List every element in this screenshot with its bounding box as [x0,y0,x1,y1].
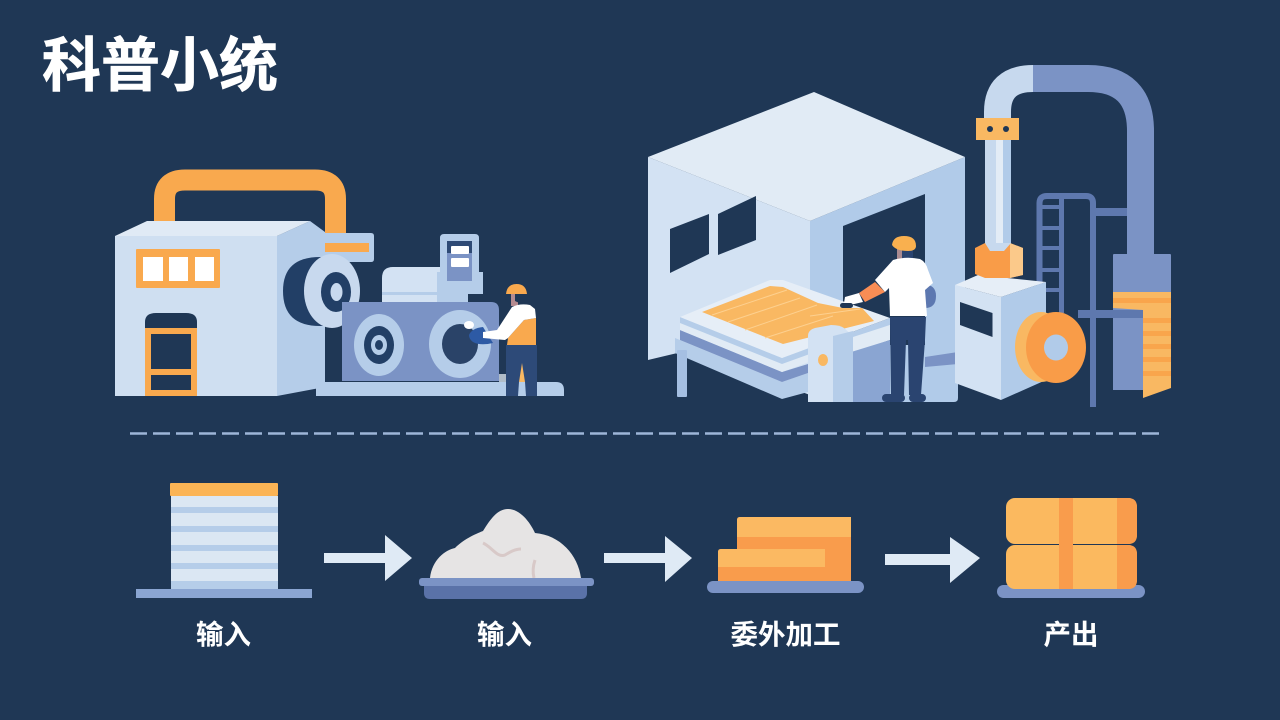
title: 科普小统 [42,33,278,99]
step 2: powder pile icon [419,509,594,599]
large roller [283,254,360,328]
upper motor and monitor [382,234,483,302]
striped tank [1113,254,1171,398]
arrow 1 [324,535,412,581]
step 3 label: 委外加工 [730,619,840,650]
press table [675,280,890,399]
step 4 label: 产出 [1044,619,1098,650]
door [145,313,197,396]
orange wheel [1015,312,1086,383]
orange sheet on table [702,286,874,344]
step 3: processed blocks icon [707,517,864,593]
ladder and frame [1040,196,1127,407]
exhaust pipe arch [998,78,1140,260]
illustration: right factory press building [648,78,1171,407]
side bracket [325,233,374,262]
tank shelf [1078,310,1143,318]
step 2 label: 输入 [477,619,532,650]
worker at table [840,236,936,402]
dashed divider [130,432,1163,435]
control window panel [136,249,220,288]
machine housing [115,221,325,396]
step 1 label: 输入 [196,619,251,650]
machine base [316,382,564,396]
arrow 2 [604,536,692,582]
illustration: left factory machine [115,180,564,396]
blower unit [955,275,1046,400]
vertical pipe [985,125,1011,250]
blue gear unit [325,302,499,381]
building [648,92,965,402]
step 4: finished bales icon [997,498,1145,598]
worker at machine [464,284,537,396]
control post [808,325,853,402]
orange overhead pipe [164,180,336,236]
arrow 3 [885,537,980,583]
orange collar [975,243,1023,278]
table right side and lower box [848,325,890,402]
step 1: stacked sheets icon [136,483,312,598]
pipe clamp [976,118,1019,140]
